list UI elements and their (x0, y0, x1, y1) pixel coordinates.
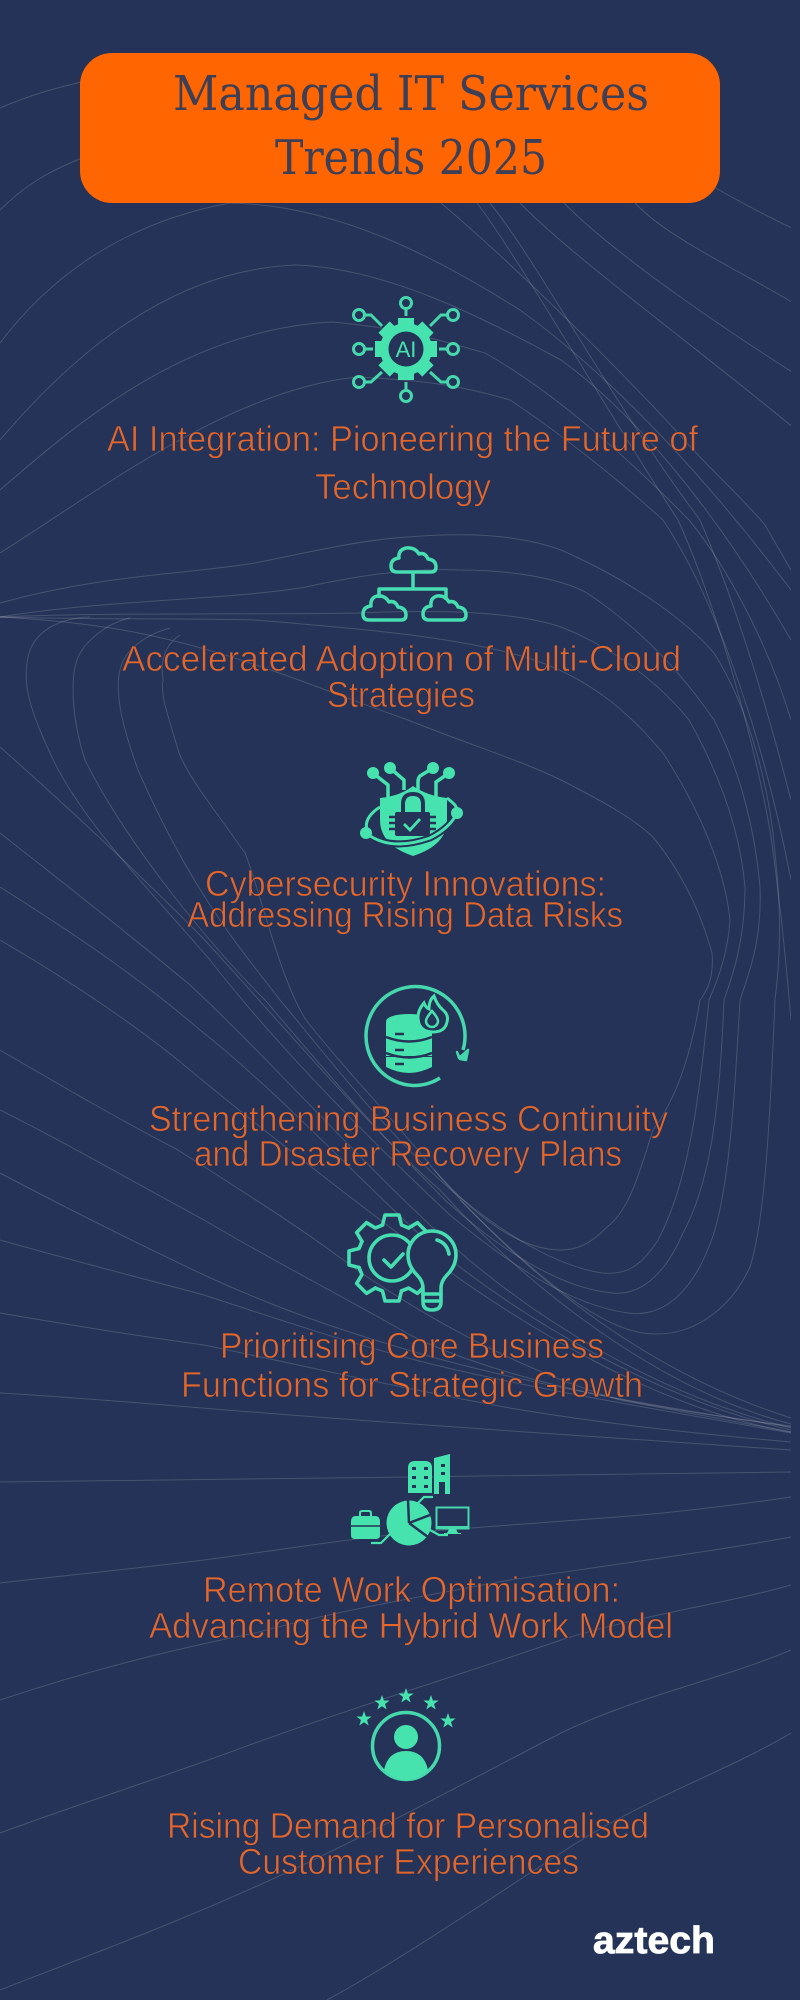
icon: disaster recovery database (366, 987, 468, 1086)
heading: AI integration: AI Integration: Pioneering the Future of (107, 418, 699, 459)
heading: remote work: Advancing the Hybrid Work Model (149, 1605, 673, 1646)
heading: remote work: Remote Work Optimisation: (203, 1569, 620, 1610)
title banner (80, 53, 720, 203)
heading: business continuity: and Disaster Recovery Plans (194, 1133, 622, 1174)
heading: business continuity: Strengthening Business Continuity (149, 1098, 668, 1139)
heading: remote work (149, 1569, 673, 1646)
icon: cybersecurity shield (360, 762, 463, 856)
heading: customer experiences: Customer Experiences (238, 1841, 579, 1882)
icon: remote work (351, 1454, 469, 1546)
title text (173, 66, 649, 186)
heading: cybersecurity: Cybersecurity Innovations: (205, 863, 606, 904)
heading: cybersecurity: Addressing Rising Data Risks (187, 894, 623, 935)
logo: aztech: aztech (593, 1920, 715, 1962)
heading: customer experiences: Rising Demand for Personalised (167, 1805, 649, 1846)
icon: multi-cloud (363, 548, 466, 620)
heading: multi-cloud: Accelerated Adoption of Multi-Cloud (122, 638, 681, 679)
icon: AI gear (354, 298, 458, 402)
icon: gear and lightbulb (349, 1215, 456, 1310)
heading: multi-cloud: Strategies (327, 674, 475, 715)
heading: business continuity (149, 1098, 668, 1174)
heading: customer experiences (167, 1805, 649, 1882)
heading: core business functions: Functions for Strategic Growth (181, 1364, 643, 1405)
heading: core business functions (181, 1325, 643, 1405)
title text: Managed IT Services (173, 66, 649, 122)
heading: AI integration (107, 418, 699, 507)
heading: AI integration: Technology (315, 466, 491, 507)
heading: multi-cloud (122, 638, 681, 715)
icon: customer with stars (356, 1688, 456, 1780)
icon: AI gear: AI (396, 337, 416, 362)
heading: core business functions: Prioritising Core Business (220, 1325, 604, 1366)
heading: cybersecurity (187, 863, 623, 935)
title text: Trends 2025 (275, 130, 547, 186)
